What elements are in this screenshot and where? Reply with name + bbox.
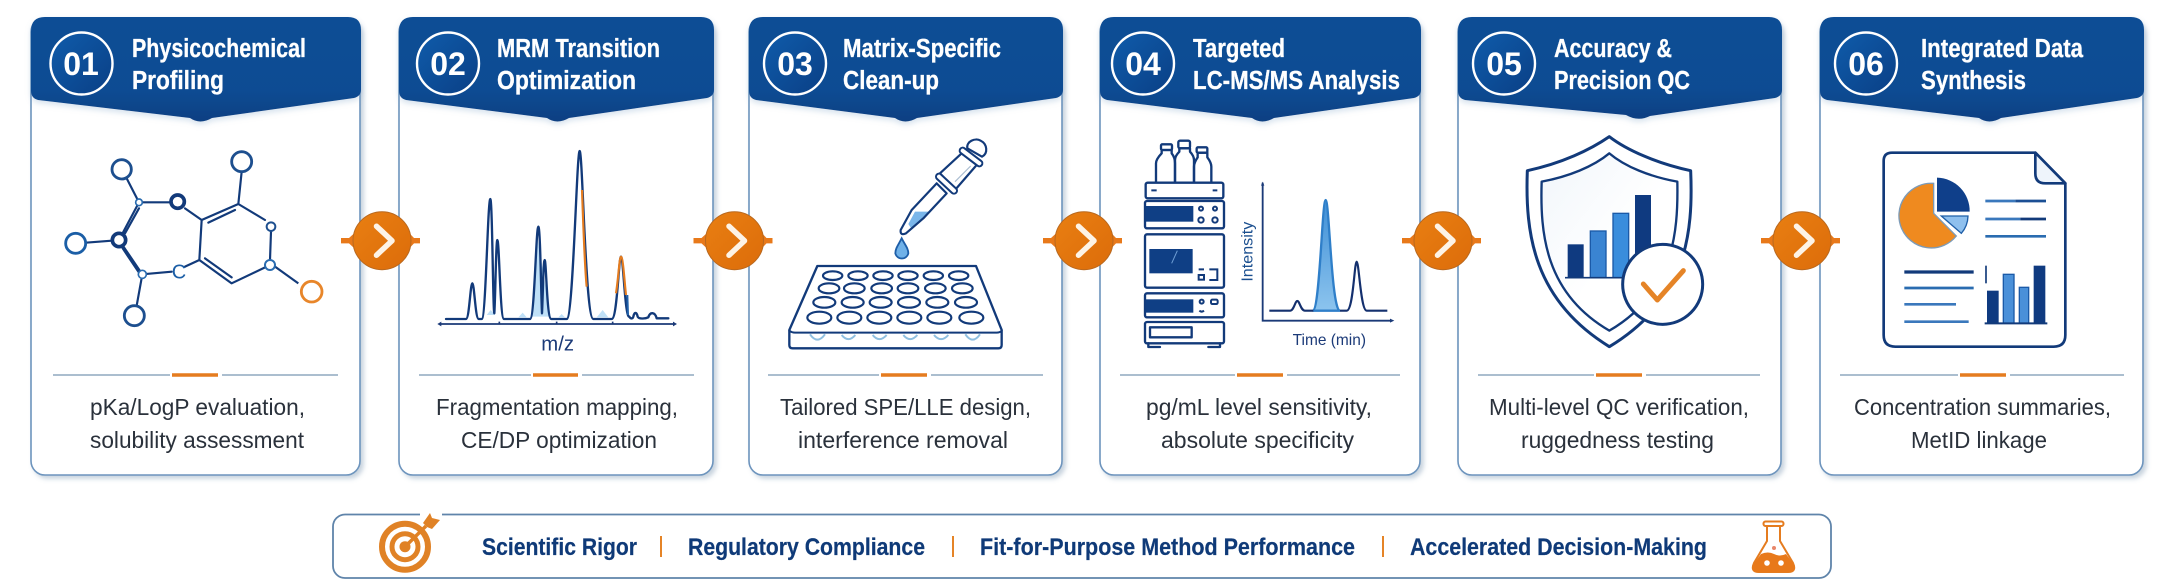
heading 02 [497, 35, 660, 95]
arrow: step 2 to 3 [694, 212, 772, 270]
number badge 03 [764, 32, 826, 94]
number badge 04: 04 [1125, 46, 1161, 82]
heading 04 [1193, 35, 1400, 95]
divider 01 [53, 370, 338, 380]
description 01: solubility assessment [90, 427, 305, 453]
description 02: Fragmentation mapping, [436, 394, 678, 420]
panel: step 02 MRM transition optimization [399, 17, 714, 475]
description 06: Concentration summaries, [1854, 394, 2111, 420]
heading 05: Precision QC [1554, 67, 1690, 95]
chart: mass spectrum [437, 151, 677, 356]
header banner 04 [1100, 17, 1421, 122]
description 02: CE/DP optimization [461, 427, 657, 453]
divider 02 [419, 370, 694, 380]
heading 06: Integrated Data [1921, 35, 2084, 63]
panel: step 04 targeted LC-MS/MS analysis [1100, 17, 1421, 475]
description 02 [436, 394, 678, 453]
divider 03 [768, 370, 1043, 380]
arrow: step 3 to 4 [1043, 212, 1122, 270]
divider 04 [1120, 370, 1400, 380]
description 05: ruggedness testing [1521, 427, 1714, 453]
heading 01: Profiling [132, 67, 224, 95]
description 04: pg/mL level sensitivity, [1146, 394, 1372, 420]
heading 05 [1554, 35, 1690, 95]
icon: molecule [66, 152, 322, 326]
arrow: step 1 to 2 [341, 212, 420, 270]
heading 03: Clean-up [843, 67, 939, 95]
heading 06 [1921, 35, 2084, 95]
number badge 02 [417, 32, 479, 94]
divider 05 [1478, 370, 1760, 380]
description 04 [1146, 394, 1372, 453]
arrow: step 5 to 6 [1761, 212, 1840, 270]
benefit: accelerated decision-making: Accelerated Decision-Making [1410, 534, 1707, 561]
panel: step 06 integrated data synthesis [1820, 17, 2144, 475]
icon: dropper with droplet [895, 140, 986, 259]
benefit: method performance: Fit-for-Purpose Method Performance [980, 534, 1355, 561]
panel: step 05 accuracy and precision QC [1458, 17, 1782, 475]
header banner 06 [1820, 17, 2144, 122]
heading 02: Optimization [497, 67, 636, 95]
icon: molecule: C [172, 262, 186, 284]
heading 01 [132, 35, 306, 95]
benefit: scientific rigor: Scientific Rigor [482, 534, 637, 561]
header banner 02 [399, 17, 714, 122]
benefit: regulatory compliance: Regulatory Compliance [688, 534, 925, 561]
heading 01: Physicochemical [132, 35, 306, 63]
icon: target with arrow [382, 511, 442, 570]
number badge 05 [1473, 32, 1535, 94]
icon: LC-MS instrument stack [1145, 141, 1394, 349]
number badge 06 [1835, 32, 1897, 94]
number badge 01: 01 [63, 46, 99, 82]
description 05: Multi-level QC verification, [1489, 394, 1749, 420]
icon: report document [1884, 153, 2065, 347]
number badge 04 [1112, 32, 1174, 94]
icon: LC-MS instrument stack: Time (min) [1293, 332, 1366, 349]
description 05 [1489, 394, 1749, 453]
heading 03 [843, 35, 1001, 95]
description 06 [1854, 394, 2111, 453]
description 03 [780, 394, 1031, 453]
icon: well plate [789, 266, 1002, 348]
number badge 06: 06 [1848, 46, 1884, 82]
chart: mass spectrum: m/z [541, 334, 574, 356]
description 01 [90, 394, 305, 453]
heading 04: LC-MS/MS Analysis [1193, 67, 1400, 95]
icon: shield with bars and check [1527, 137, 1703, 347]
heading 03: Matrix-Specific [843, 35, 1001, 63]
header banner 05 [1458, 17, 1782, 119]
arrow: step 4 to 5 [1402, 212, 1481, 270]
panel: step 03 matrix-specific clean-up [749, 17, 1063, 475]
description 06: MetID linkage [1911, 427, 2047, 453]
heading 06: Synthesis [1921, 67, 2026, 95]
divider 06 [1840, 370, 2124, 380]
panel: step 01 physicochemical profiling [31, 17, 361, 475]
heading 04: Targeted [1193, 35, 1285, 63]
number badge 05: 05 [1486, 46, 1522, 82]
header banner 01 [31, 17, 361, 122]
panel: bottom value banner [333, 511, 1831, 578]
description 01: pKa/LogP evaluation, [90, 394, 305, 420]
number badge 03: 03 [777, 46, 813, 82]
number badge 02: 02 [430, 46, 466, 82]
header banner 03 [749, 17, 1063, 122]
heading 02: MRM Transition [497, 35, 660, 63]
description 04: absolute specificity [1161, 427, 1354, 453]
heading 05: Accuracy & [1554, 35, 1672, 63]
description 03: interference removal [798, 427, 1008, 453]
icon: LC-MS instrument stack: Intensity [1240, 222, 1257, 282]
number badge 01 [50, 32, 112, 94]
description 03: Tailored SPE/LLE design, [780, 394, 1031, 420]
icon: flask [1752, 522, 1795, 572]
